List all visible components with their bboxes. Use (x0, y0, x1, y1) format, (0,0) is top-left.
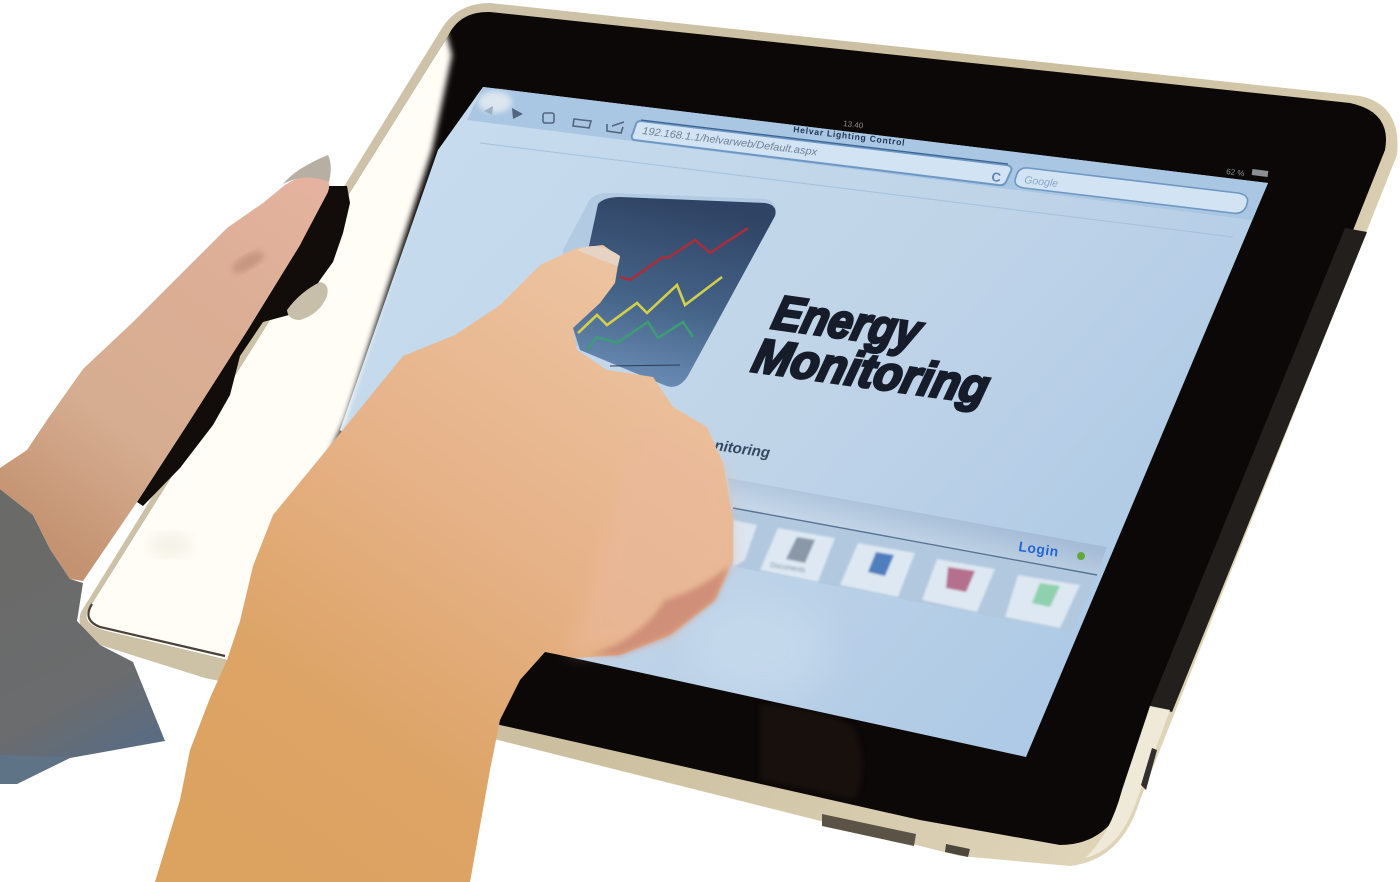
search text: Google (1024, 174, 1059, 190)
heading: Energy Monitoring (747, 286, 995, 415)
finger fold (590, 565, 730, 655)
soft light patch (703, 617, 812, 704)
clock: 13.40 (843, 119, 864, 130)
bezel reflection (760, 705, 863, 800)
chart lines (620, 228, 748, 280)
battery icon (1252, 169, 1268, 177)
search field (1015, 168, 1248, 213)
battery status: 62 % (1226, 167, 1245, 178)
fingernail (577, 246, 620, 266)
right hand (155, 245, 733, 882)
side button (1141, 748, 1157, 790)
tile label: Documents (770, 562, 806, 575)
caption: nitoring (713, 437, 771, 462)
glare spot (154, 534, 186, 556)
heading: Energy Monitoring: Monitoring (747, 329, 995, 415)
toolbar icons (484, 106, 624, 133)
browser toolbar (467, 87, 1268, 220)
left glass glare (86, 32, 456, 660)
page title: Helvar Lighting Control (793, 124, 905, 148)
dock connector (822, 814, 916, 846)
lower cuff (0, 755, 70, 784)
chart baseline (610, 365, 680, 366)
app icon with chart (563, 193, 776, 387)
pink shading on fingers (570, 420, 733, 655)
address bar (632, 121, 1011, 185)
home button reflection (287, 282, 328, 320)
address bar top line (641, 120, 1008, 164)
microphone slot (945, 844, 970, 857)
login link: Login (1018, 538, 1059, 560)
toolbar highlight (478, 91, 512, 113)
reload icon: C (991, 169, 1002, 185)
app tiles (733, 520, 1080, 628)
left hand (0, 175, 329, 581)
left thumbnail (283, 155, 331, 184)
icon band (700, 478, 1107, 632)
black reflection (137, 186, 350, 506)
page line (480, 143, 1233, 237)
lower left inner rim line (88, 604, 225, 656)
heading: Energy Monitoring: Energy (767, 286, 930, 360)
thumb crease (229, 247, 267, 277)
left sleeve (0, 489, 165, 784)
url text: 192.168.1.1/helvarweb/Default.aspx (642, 125, 819, 159)
status dot (1077, 552, 1085, 560)
side case strip (1150, 228, 1367, 712)
screen (340, 87, 1268, 757)
bright corner of rim (1085, 706, 1170, 858)
